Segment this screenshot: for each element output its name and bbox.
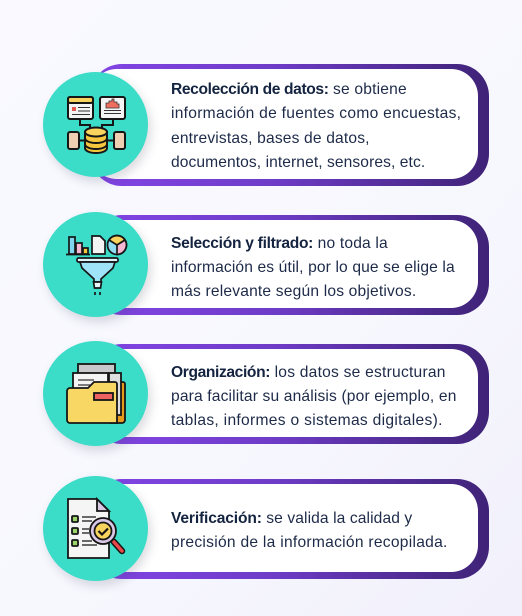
icon: checklist with magnifying glass: [43, 476, 148, 581]
text: recolección de datos: entrevistas, bases de datos,: [171, 130, 370, 147]
text: organización: Organización: los datos se estructuran: [171, 364, 446, 380]
text: selección y filtrado: más relevante según los objetivos.: [171, 283, 416, 300]
text: selección y filtrado: información es útil, por lo que se elige la: [171, 259, 455, 276]
panel: recolección de datos: [90, 64, 489, 186]
text: verificación: [171, 510, 448, 551]
text: recolección de datos: Recolección de datos: se obtiene: [171, 81, 407, 98]
text: selección y filtrado: [171, 234, 455, 300]
text: verificación: precisión de la información recopilada.: [171, 534, 448, 551]
icon: folder with documents: [43, 341, 148, 446]
text: organización: tablas, informes o sistemas digitales).: [171, 412, 443, 429]
text: selección y filtrado: Selección y filtrado: no toda la: [171, 234, 388, 252]
text: recolección de datos: [171, 81, 461, 171]
text: organización: [171, 364, 457, 429]
icon: funnel filtering documents: [43, 212, 148, 317]
text: recolección de datos: documentos, internet, sensores, etc.: [171, 154, 425, 171]
text: organización: para facilitar su análisis (por ejemplo, en: [171, 388, 457, 405]
panel: organización: [90, 344, 489, 444]
panel: verificación: [90, 479, 489, 579]
text: verificación: Verificación: se valida la calidad y: [171, 510, 412, 526]
text: recolección de datos: información de fuentes como encuestas,: [171, 105, 461, 122]
panel: selección y filtrado: [90, 215, 489, 315]
icon: database with data sources: [43, 72, 148, 177]
